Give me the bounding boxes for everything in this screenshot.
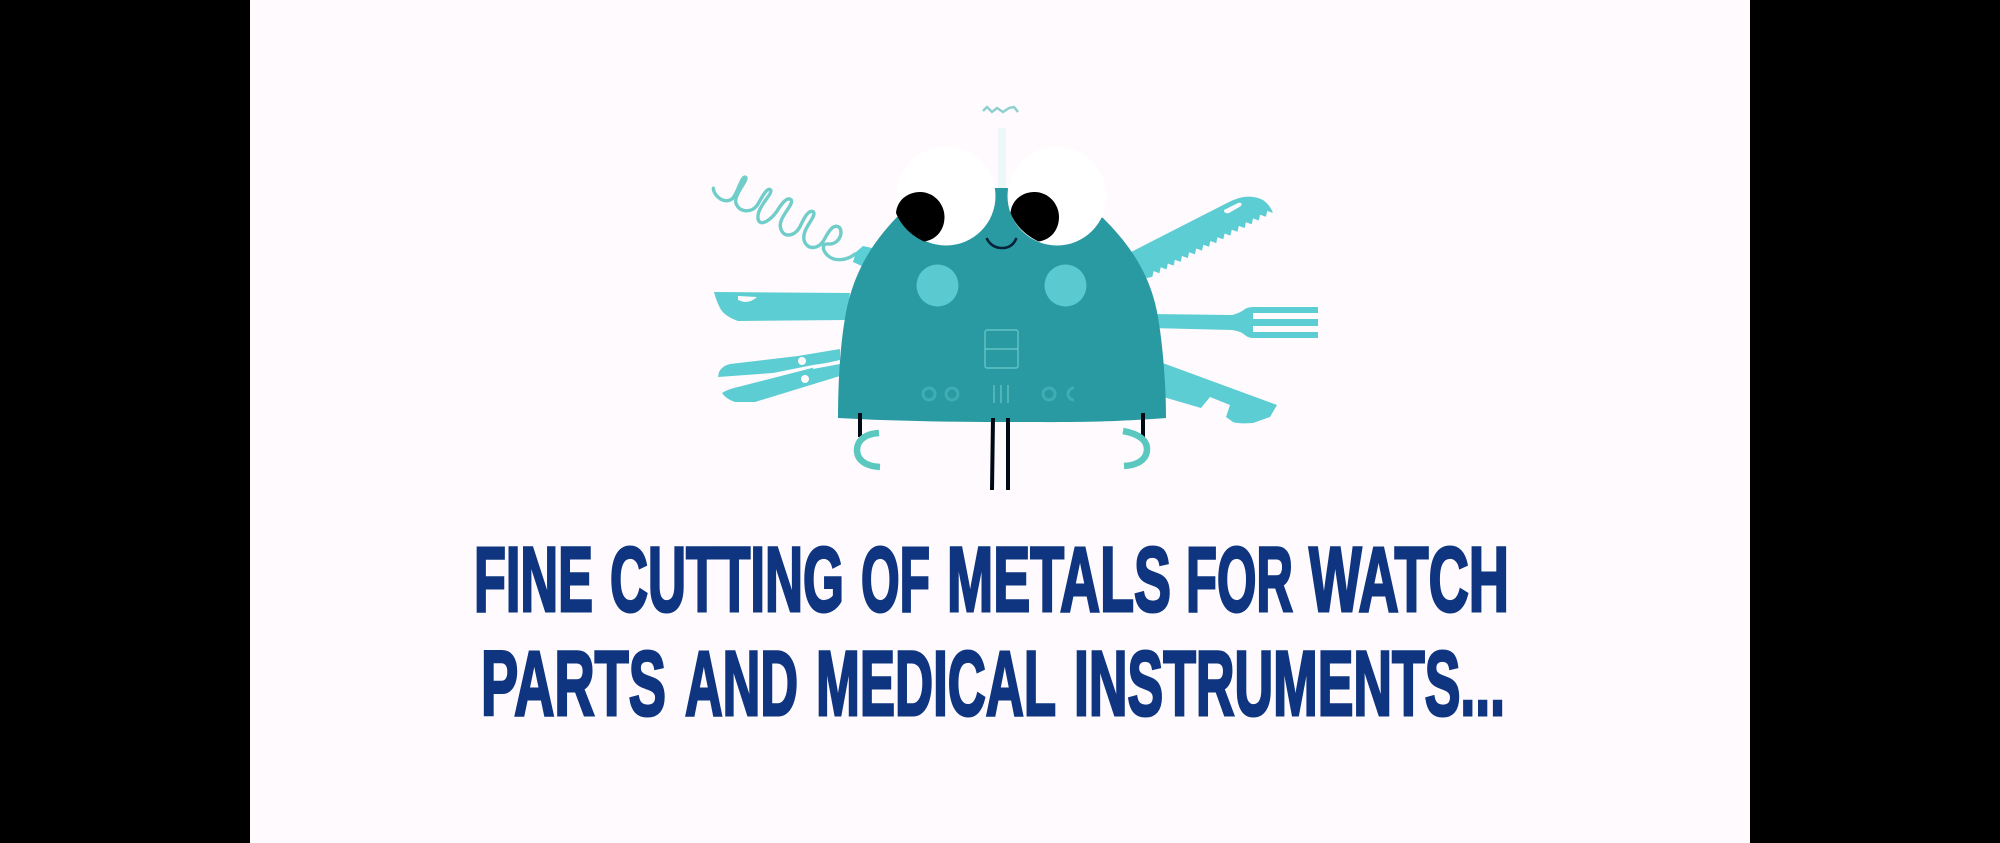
tool: spring xyxy=(713,177,872,268)
eye whites xyxy=(896,146,1106,246)
caption line 1: OF xyxy=(861,529,930,631)
robot multi-tool character xyxy=(713,107,1318,490)
tool: bottle opener xyxy=(1160,362,1277,423)
chest panel xyxy=(985,330,1018,368)
legs xyxy=(860,413,1143,490)
smile xyxy=(987,239,1016,248)
tool: saw xyxy=(1125,197,1273,279)
chest buttons xyxy=(923,385,1074,403)
caption line 2: INSTRUMENTS... xyxy=(1074,633,1505,735)
robot body xyxy=(838,188,1166,422)
pupils xyxy=(896,192,1059,242)
antenna xyxy=(983,107,1018,190)
caption line 2: AND xyxy=(685,633,798,735)
hands xyxy=(857,431,1147,467)
caption line 1: METALS xyxy=(947,529,1171,631)
tool: scissor blades xyxy=(718,349,840,402)
caption line 1: FOR xyxy=(1186,529,1293,631)
tool: fork xyxy=(1150,307,1318,338)
caption line 2 xyxy=(481,633,1505,735)
slide background xyxy=(250,0,1750,843)
caption line 1: FINE xyxy=(474,529,593,631)
tool: knife blade xyxy=(714,292,850,321)
caption line 1 xyxy=(474,529,1509,631)
caption line 1: CUTTING xyxy=(610,529,844,631)
cheeks xyxy=(916,264,1086,306)
caption line 2: MEDICAL xyxy=(816,633,1056,735)
caption line 2: PARTS xyxy=(481,633,666,735)
caption line 1: WATCH xyxy=(1309,529,1509,631)
